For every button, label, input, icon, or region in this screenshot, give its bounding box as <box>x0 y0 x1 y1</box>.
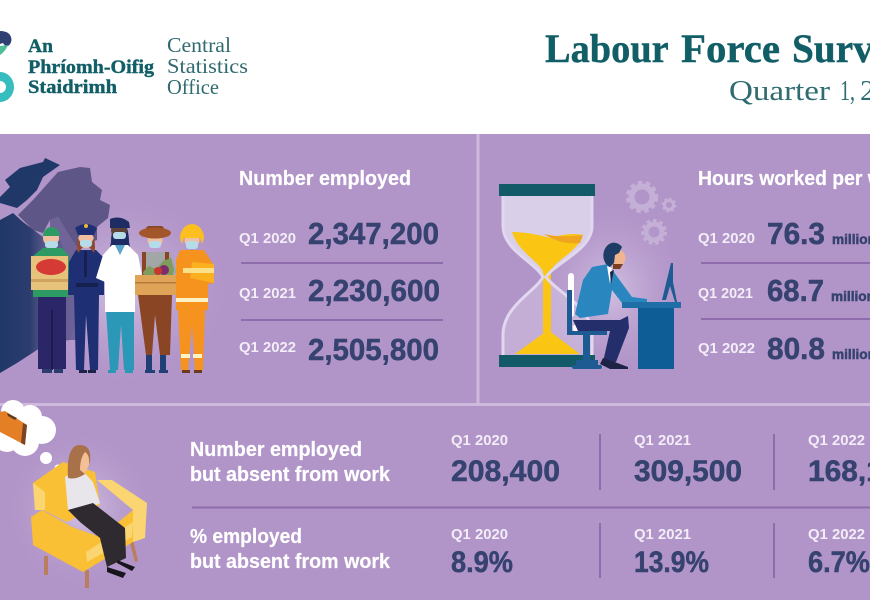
stat: Q1 2020 count <box>451 433 560 488</box>
gears <box>628 182 676 244</box>
row: Q1 2021: 2,230,600 <box>308 273 440 308</box>
heading: number absent: but absent from work <box>190 464 391 486</box>
purple background panel <box>0 134 870 600</box>
row: Q1 2022: 80.8 <box>767 331 825 366</box>
panel: absent from work <box>0 400 870 595</box>
briefcase <box>0 411 27 445</box>
row: Q1 2020 <box>698 216 870 251</box>
row: Q1 2022: Q1 2022 <box>698 341 755 357</box>
illustration: woman in armchair <box>0 400 160 595</box>
stat: Q1 2021 percent: Q1 2021 <box>634 527 691 543</box>
stat: Q1 2021 percent: 13.9% <box>634 546 709 579</box>
worker: firefighter <box>176 224 214 373</box>
stat: Q1 2020 percent <box>451 527 513 579</box>
panel: number employed <box>0 158 443 395</box>
stat: Q1 2022 percent <box>808 527 870 579</box>
row: Q1 2021: 68.7 <box>767 273 824 308</box>
heading: percent absent: % employed <box>190 526 302 548</box>
title: Labour <box>545 26 668 71</box>
subtitle: 1, <box>840 75 855 107</box>
logo text: English name: Office <box>167 75 219 99</box>
worker: doctor <box>96 218 143 373</box>
row: Q1 2022 <box>698 331 870 366</box>
stat: Q1 2021 percent <box>634 527 709 579</box>
stat: Q1 2022 count: Q1 2022 <box>808 433 865 449</box>
dividers <box>0 134 870 404</box>
worker: police officer <box>68 224 104 373</box>
header band <box>0 0 870 134</box>
panel: hours worked <box>499 168 870 385</box>
row: Q1 2020: Q1 2020 <box>698 231 755 247</box>
row: Q1 2021: Q1 2021 <box>239 286 296 302</box>
illustration: map and workers <box>0 158 240 395</box>
stat: Q1 2021 count: Q1 2021 <box>634 433 691 449</box>
row: Q1 2021: Q1 2021 <box>698 286 753 302</box>
logo text: English name: Central <box>167 33 231 57</box>
office worker <box>567 243 681 369</box>
row: Q1 2020: 76.3 <box>767 216 825 251</box>
title: Force <box>681 26 780 71</box>
logo text: Irish name <box>28 36 155 98</box>
logo text: Irish name: Phríomh-Oifig <box>28 57 155 78</box>
stat: Q1 2022 count <box>808 433 870 488</box>
row: Q1 2020: Q1 2020 <box>239 231 296 247</box>
logo text: Irish name: Staidrimh <box>28 77 117 98</box>
logo text: English name <box>167 33 248 99</box>
row: Q1 2021 <box>239 273 440 308</box>
heading: Number employed <box>239 168 411 190</box>
subtitle: Quarter <box>729 75 830 107</box>
logo <box>0 31 248 102</box>
thought bubble <box>0 400 62 472</box>
row: Q1 2021 <box>698 273 870 308</box>
logo text: Irish name: An <box>28 36 53 57</box>
row: Q1 2020 <box>239 216 439 251</box>
icon: logo mark <box>0 31 14 102</box>
worker: farmer <box>135 226 178 373</box>
heading: number absent: Number employed <box>190 439 362 461</box>
row: Q1 2022 <box>239 332 439 367</box>
stat: Q1 2020 percent: Q1 2020 <box>451 527 508 543</box>
stat: Q1 2020 percent: 8.9% <box>451 546 513 579</box>
stat: Q1 2021 count <box>634 433 742 488</box>
row: Q1 2020: 2,347,200 <box>308 216 439 251</box>
row: Q1 2022: 2,505,800 <box>308 332 439 367</box>
stat: Q1 2022 percent: Q1 2022 <box>808 527 865 543</box>
row: Q1 2022: Q1 2022 <box>239 340 296 356</box>
stat: Q1 2020 count: Q1 2020 <box>451 433 508 449</box>
hourglass <box>499 184 595 367</box>
armchair <box>31 462 147 588</box>
stat: Q1 2021 count: 309,500 <box>634 455 742 488</box>
logo text: English name: Statistics <box>167 54 248 78</box>
illustration: hourglass and office worker <box>499 182 695 385</box>
stat: Q1 2020 count: 208,400 <box>451 455 560 488</box>
woman <box>65 445 135 578</box>
map of Ireland <box>0 158 110 373</box>
heading: percent absent: but absent from work <box>190 551 391 573</box>
worker: delivery person <box>31 227 69 373</box>
